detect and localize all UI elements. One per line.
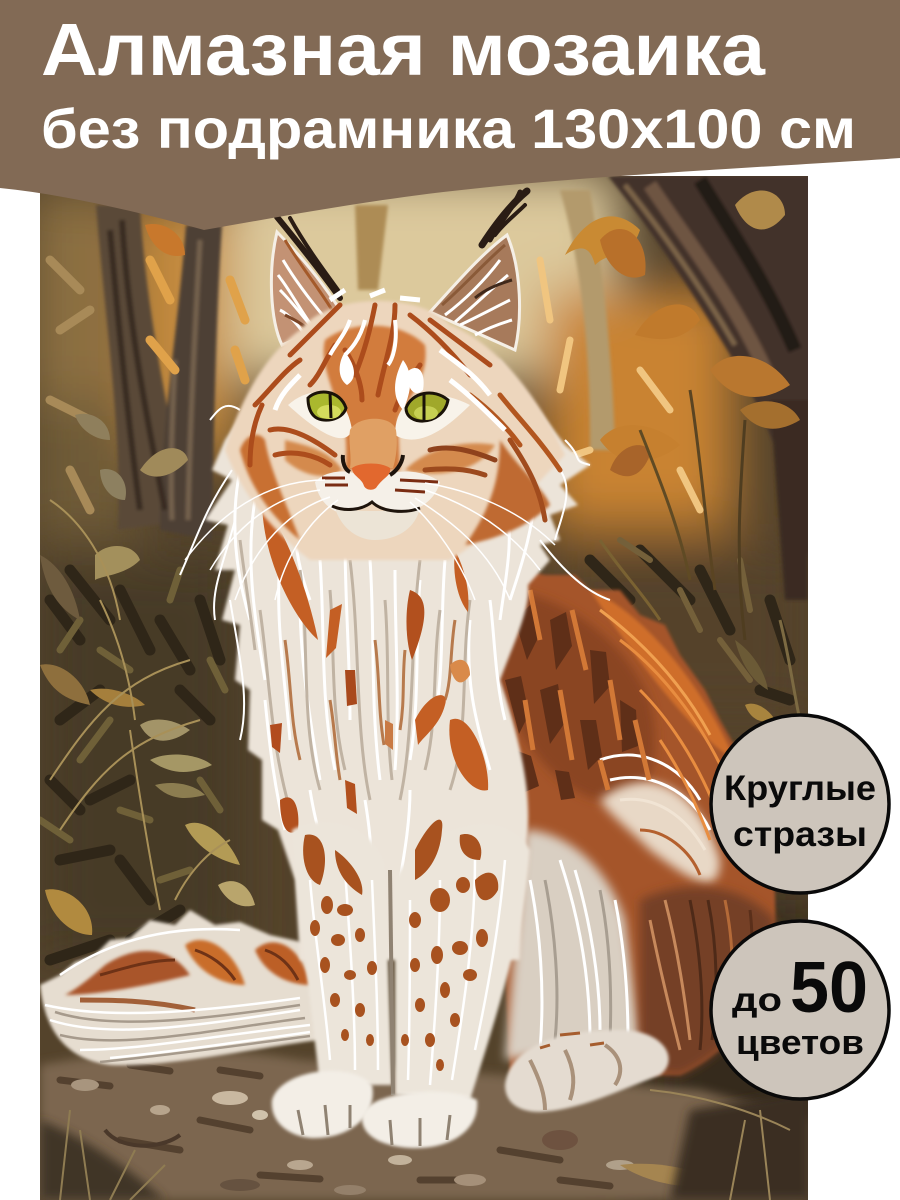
white forehead marks [340,352,354,385]
background foliage dabs [40,260,790,960]
badge: up to 50 colours: до [732,981,782,1018]
lynx [40,191,775,1148]
title: Алмазная мозаика [41,8,766,91]
left tree trunks [96,190,615,540]
forehead and cheek orange fur [324,326,426,470]
ears [271,191,527,350]
chest fur strokes [235,470,535,880]
ground with pebbles [40,1051,810,1200]
forehead stripes [250,305,560,520]
rosette marks on flank [505,602,638,800]
autumn leaves [40,191,800,935]
badge: round rhinestones [711,715,889,893]
badge: round rhinestones: Круглые [724,769,876,808]
whiskers [185,480,555,600]
muzzle pads [315,471,372,514]
ear tufts [277,191,527,298]
front paws [272,1071,477,1148]
front legs with spots [292,820,530,1100]
head [185,290,565,600]
badge: round rhinestones: стразы [733,815,867,854]
chest and ruff [180,360,610,960]
forest background [30,170,820,1200]
nose [352,464,390,490]
painting: lynx in autumn forest [30,170,820,1200]
badge: up to 50 colours [711,921,889,1099]
chin [335,508,420,540]
right tree [608,176,810,600]
stems [50,390,800,910]
badge: up to 50 colours: 50 [790,948,868,1028]
fur wisps outside silhouette [180,406,610,740]
mouth [332,502,420,511]
right eye [406,393,448,421]
hind paw [505,1030,669,1112]
muzzle bridge [349,419,397,468]
tail [40,910,320,1065]
subtitle: без подрамника 130х100 см [41,97,856,160]
header banner [0,0,900,230]
badge: up to 50 colours: цветов [736,1024,864,1062]
eye patches [288,392,352,438]
left eye [308,392,346,420]
back and haunch [480,560,775,1075]
